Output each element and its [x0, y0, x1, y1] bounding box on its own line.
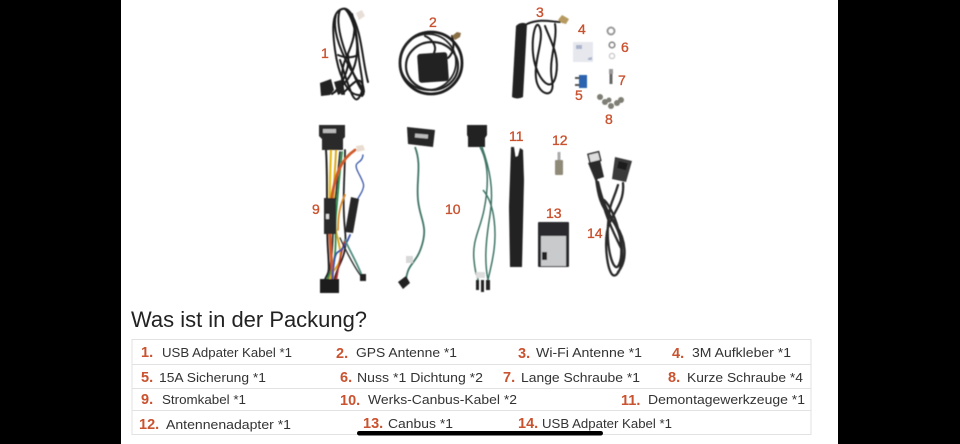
- photo callout numbers: 8: [605, 111, 613, 127]
- photo callout numbers: 14: [587, 225, 603, 241]
- table row 2: Lange Schraube *1: [521, 370, 640, 385]
- table row 1: Wi-Fi Antenne *1: [536, 345, 642, 360]
- item 10: factory Canbus cable B: [467, 125, 495, 292]
- table row 3: [141, 392, 805, 409]
- photo callout numbers: 7: [618, 72, 626, 88]
- table row 4: 13.: [363, 416, 383, 432]
- table row 3: 11.: [621, 393, 640, 409]
- photo callout numbers: 11: [509, 128, 524, 144]
- item 10: factory Canbus cable A: [398, 127, 435, 289]
- table row 4: USB Adpater Kabel *1: [542, 416, 672, 431]
- item 6: nut and seal washers: [608, 28, 615, 59]
- table row 1: GPS Antenne *1: [356, 345, 457, 360]
- table row 2: 7.: [503, 370, 515, 386]
- photo callout numbers: 9: [312, 201, 320, 217]
- table row 4: [139, 416, 672, 433]
- home indicator bar: [357, 431, 603, 436]
- table row 2: 15A Sicherung *1: [159, 370, 266, 385]
- table row 1: USB Adpater Kabel *1: [162, 345, 292, 360]
- item 14: USB adapter cable: [588, 152, 632, 276]
- table row 1: 4.: [672, 346, 684, 362]
- table row 1: 1.: [141, 345, 153, 361]
- table row 1: 2.: [336, 346, 348, 362]
- table row 3: Stromkabel *1: [162, 392, 246, 407]
- table row 3: 9.: [141, 392, 153, 408]
- table row 2: 8.: [668, 370, 680, 386]
- table row 1: 3M Aufkleber *1: [692, 345, 791, 360]
- photo callout numbers: 12: [552, 132, 568, 148]
- table row 4: 14.: [518, 416, 538, 432]
- table row 3: Werks-Canbus-Kabel *2: [368, 392, 517, 407]
- item 12: antenna adapter: [555, 152, 563, 175]
- photo callout numbers: [312, 4, 629, 241]
- item 9: power cable harness: [324, 150, 364, 282]
- photo callout numbers: 5: [575, 87, 583, 103]
- item 5: fuse: [575, 75, 587, 88]
- table row 4: Antennenadapter *1: [166, 417, 291, 432]
- photo callout numbers: 13: [546, 205, 562, 221]
- item 9 connectors and fuse holder: [319, 125, 366, 293]
- page background: [121, 0, 838, 444]
- photo callout numbers: 1: [321, 45, 329, 61]
- item 4: 3M sticker: [573, 42, 593, 62]
- photo callout numbers: 6: [621, 39, 629, 55]
- parts table grid: [132, 340, 811, 434]
- table row 1: [141, 345, 791, 362]
- table row 4: Canbus *1: [388, 416, 453, 431]
- table row 2: 6.: [340, 370, 352, 386]
- table row 4: 12.: [139, 417, 159, 433]
- photo callout numbers: 4: [578, 21, 586, 37]
- item 13: Canbus box: [538, 222, 569, 267]
- item 3: Wi-Fi antenna: [512, 15, 569, 98]
- photo callout numbers: 3: [536, 4, 544, 20]
- table row 2: Nuss *1 Dichtung *2: [357, 370, 483, 385]
- table row 2: [141, 370, 803, 386]
- item 11: removal tool: [509, 147, 524, 267]
- product photo: package contents: [319, 9, 632, 293]
- table row 1: 3.: [518, 346, 530, 362]
- item 8: short screws: [597, 94, 624, 109]
- photo callout numbers: 2: [429, 14, 437, 30]
- item 7: long screw: [609, 69, 613, 84]
- table row 2: Kurze Schraube *4: [687, 370, 803, 385]
- item 1: USB adapter cable: [320, 9, 368, 99]
- table row 2: 5.: [141, 370, 153, 386]
- table row 3: Demontagewerkzeuge *1: [648, 392, 805, 407]
- heading: Was ist in der Packung?: [131, 307, 367, 332]
- photo callout numbers: 10: [445, 201, 461, 217]
- table row 3: 10.: [340, 393, 360, 409]
- item 2: GPS antenna: [400, 32, 462, 94]
